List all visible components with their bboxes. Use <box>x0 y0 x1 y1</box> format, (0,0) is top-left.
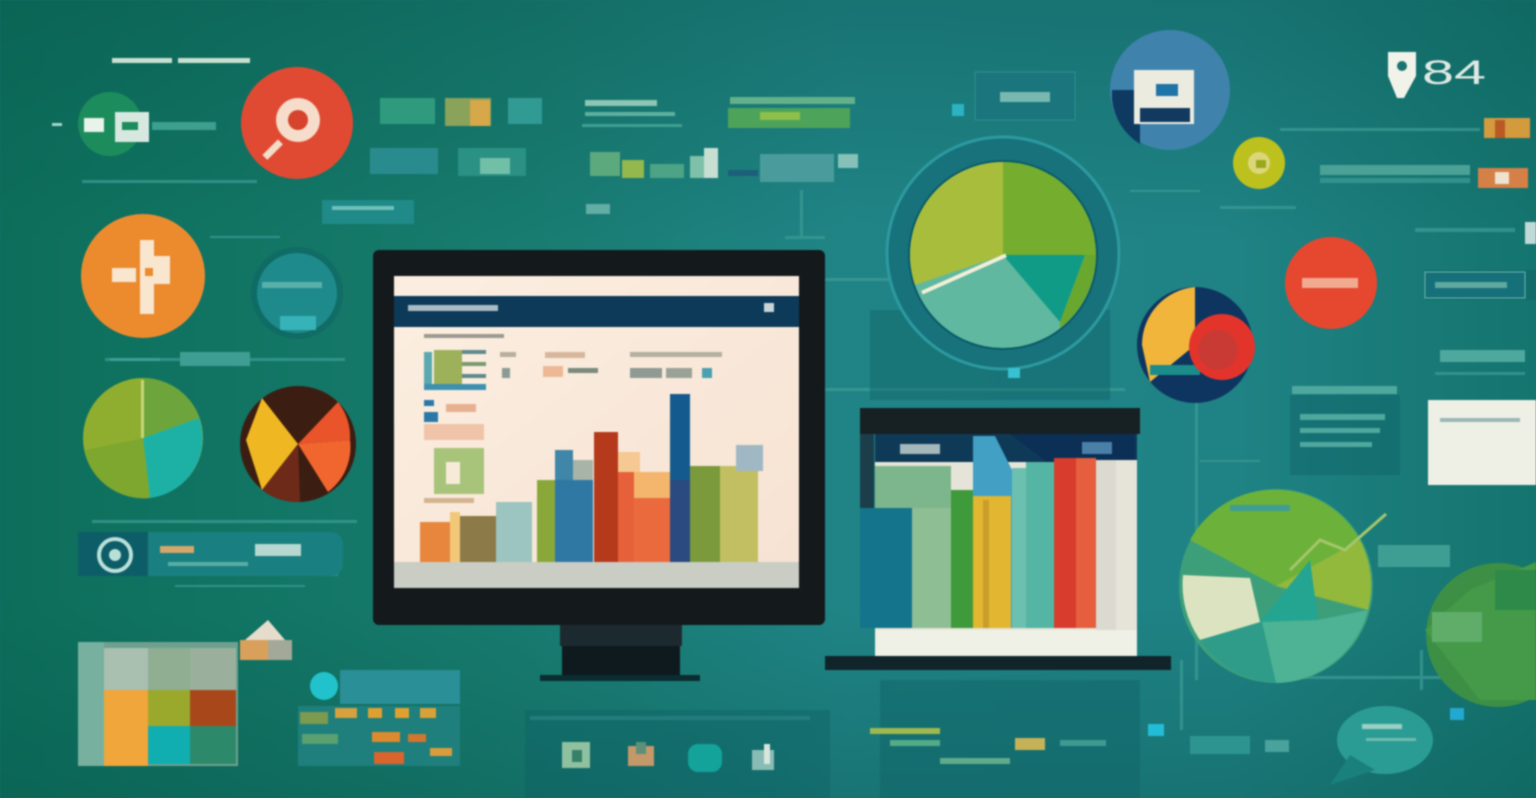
icon: blue document badge <box>1110 30 1230 150</box>
icon: red speech badge <box>1285 237 1377 329</box>
icon: faint teal badge <box>257 253 337 333</box>
monitor screen <box>394 276 799 588</box>
screen stats <box>500 352 722 378</box>
top right location glyphs <box>1388 52 1486 98</box>
top centre text and mini chart strip <box>322 97 858 224</box>
laptop chart <box>860 434 1137 656</box>
icon: green badge <box>52 92 216 156</box>
screen bar chart <box>420 394 763 562</box>
status bar panel <box>78 532 343 576</box>
top left small text label <box>112 58 250 63</box>
icon: red location badge <box>241 67 353 179</box>
top callout <box>975 72 1075 120</box>
icon: orange dollar badge <box>81 214 205 338</box>
icon: yellow badge <box>1233 137 1285 189</box>
top right location glyphs: 84 <box>1422 54 1486 92</box>
monitor <box>373 250 825 681</box>
screen side list <box>424 334 504 503</box>
monitor stand <box>540 624 700 681</box>
monitor bezel <box>373 250 825 625</box>
pie chart: yellow red brown <box>240 386 356 502</box>
donut with red circle <box>1137 287 1255 403</box>
left small text row <box>110 352 250 366</box>
pie chart: green <box>83 378 203 498</box>
small right text block <box>1230 505 1450 567</box>
teal speech bubble <box>1330 706 1433 785</box>
radar ring with green pie <box>887 104 1119 378</box>
screen header <box>394 296 799 327</box>
top right icons and text <box>1320 118 1536 244</box>
right text block <box>1292 350 1525 447</box>
right text panel <box>1425 272 1525 298</box>
right white card <box>1428 400 1536 485</box>
map globe chart <box>1179 489 1386 683</box>
icon: small house and data tiles <box>240 620 460 766</box>
right green leaf chart <box>1425 562 1536 707</box>
heat map block <box>78 642 238 766</box>
laptop <box>825 408 1171 670</box>
connector lines and faint panels <box>82 128 1525 730</box>
bottom right text blocks <box>870 708 1464 764</box>
bottom toolbar icons <box>562 742 774 772</box>
